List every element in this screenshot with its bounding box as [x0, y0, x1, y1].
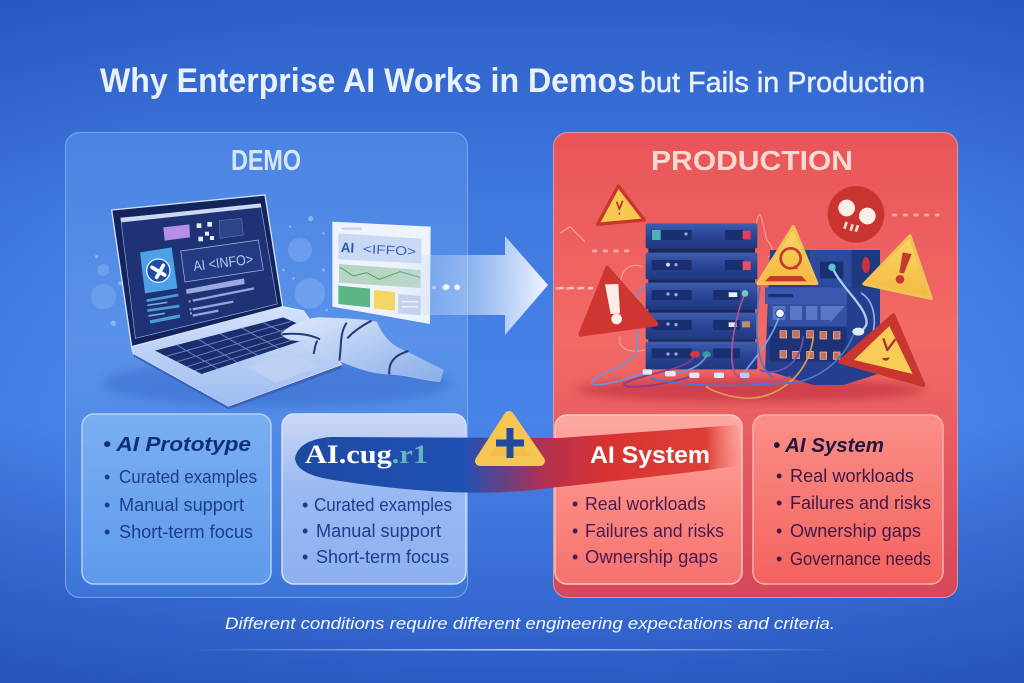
- floating document card: <IFFO>: [363, 242, 416, 259]
- robot hand: [281, 317, 443, 382]
- card list: •: [104, 467, 110, 487]
- card list: •: [302, 495, 308, 515]
- card list: Real workloads: [585, 494, 706, 514]
- card list: [572, 494, 724, 567]
- card list: •: [776, 466, 782, 486]
- ribbon: demo to production transition: [295, 425, 742, 493]
- title: but Fails in Production: [640, 67, 925, 99]
- trackpad: [247, 353, 320, 383]
- title: [100, 62, 925, 100]
- card: AI system left: [555, 415, 742, 584]
- card list: •: [104, 522, 110, 542]
- card list: •: [572, 521, 578, 541]
- caption: Different conditions require different engineering expectations and criteria.: [225, 614, 835, 633]
- card list: Ownership gaps: [790, 521, 921, 541]
- card list: Governance needs: [790, 549, 931, 569]
- card list: Manual support: [119, 495, 244, 515]
- card list: •: [302, 521, 308, 541]
- card list: [302, 495, 452, 567]
- illustration: failing servers with warnings: [557, 186, 938, 402]
- warning: bottom triangle: [840, 315, 923, 385]
- card list: •: [776, 549, 782, 569]
- ribbon label: AI System: AI System: [590, 442, 710, 469]
- keyboard: [155, 317, 322, 374]
- connector dots: [444, 284, 460, 290]
- heading: demo: DEMO: [231, 145, 301, 177]
- card list: •: [572, 547, 578, 567]
- card heading: • AI System: [773, 435, 884, 457]
- floating particles: [91, 216, 328, 326]
- card: AI system right: [753, 415, 943, 584]
- card list: Failures and risks: [790, 493, 931, 513]
- card list: Ownership gaps: [585, 547, 718, 567]
- card: AI prototype: [82, 414, 271, 584]
- card list: Short-term focus: [316, 547, 449, 567]
- card list: Short-term focus: [119, 522, 253, 542]
- card heading: • AI Prototype: [103, 434, 251, 456]
- card list: [104, 467, 257, 542]
- panel: production: [554, 132, 958, 598]
- ribbon label: garbled left: AI.cug .r1: [305, 440, 428, 469]
- card list: Failures and risks: [585, 521, 724, 541]
- heading: production: PRODUCTION: [651, 145, 853, 176]
- screen text: AI <INFO>: [193, 252, 254, 275]
- warning: small triangle: [598, 186, 644, 224]
- warning: red triangle: [581, 268, 656, 334]
- server stack: [646, 223, 757, 369]
- card list: •: [104, 495, 110, 515]
- title: Why Enterprise AI Works in Demos: [100, 62, 635, 100]
- card list: Curated examples: [119, 467, 257, 487]
- card list: Real workloads: [790, 466, 914, 486]
- network switch: [765, 250, 880, 385]
- card list: Curated examples: [314, 495, 452, 515]
- illustration: laptop with robot hand: [91, 195, 460, 409]
- laptop base: [132, 307, 342, 407]
- floating document card: AI: [341, 239, 355, 256]
- laptop screen: [112, 195, 283, 347]
- faint signal lines: [557, 214, 938, 351]
- patch cables: [592, 264, 874, 398]
- panel: demo: [66, 132, 468, 598]
- card list: Manual support: [316, 521, 441, 541]
- arrow: demo to production: [385, 236, 548, 335]
- icon: plus warning: [480, 416, 540, 461]
- card list: [776, 466, 931, 569]
- warning: right triangle: [864, 236, 931, 298]
- card list: •: [572, 494, 578, 514]
- card list: •: [776, 493, 782, 513]
- connector: dashes into server: [560, 287, 592, 289]
- card: demo repeat: [282, 414, 466, 584]
- warning: central triangle: [758, 227, 817, 283]
- card list: •: [776, 521, 782, 541]
- connector dots: [432, 284, 460, 290]
- error: skull badge: [828, 186, 884, 243]
- floating document card: [332, 222, 431, 324]
- card list: •: [302, 547, 308, 567]
